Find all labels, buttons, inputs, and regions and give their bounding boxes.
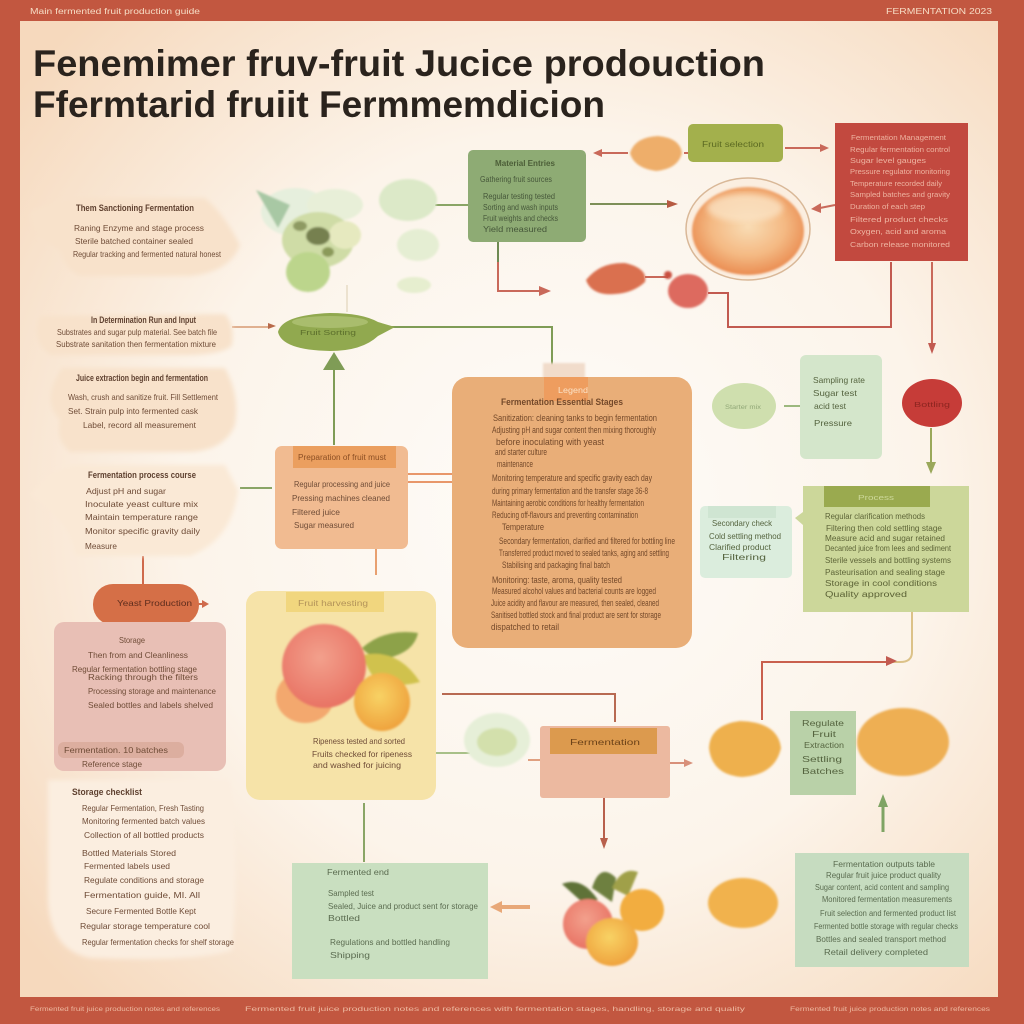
panel: yellow fruit box: and washed for juicing	[313, 760, 401, 770]
icon: pale green ovals	[379, 179, 439, 293]
label: green top tag: Fruit selection	[702, 140, 764, 149]
panel: large orange center box: maintenance	[497, 459, 533, 469]
panel: left callout 4: Inoculate yeast culture mix	[85, 499, 199, 509]
panel: large orange center box: during primary fermentation and the transfer stage 36-8	[492, 486, 648, 496]
icon: green oval center: Fruit Sorting	[300, 330, 356, 337]
header small text right: FERMENTATION 2023	[886, 7, 993, 16]
panel: green top box: Sorting and wash inputs	[483, 203, 558, 212]
pink box sub label	[58, 742, 184, 758]
icon: tab above center box	[543, 363, 585, 379]
panel: bottom green center box: Fermented end	[327, 867, 389, 877]
icon: juice bowl	[686, 178, 810, 280]
panel: top left callout: Raning Enzyme and stage process	[74, 223, 204, 233]
panel: red top right box: Filtered product checks	[850, 215, 948, 224]
footer small text: Fermented fruit juice production notes and references	[30, 1007, 220, 1013]
panel: large orange center box: Measured alcohol values and bacterial counts are logged	[492, 586, 656, 596]
panel: yellow fruit box: Fruit harvesting	[298, 599, 368, 608]
panel: top left callout: Regular tracking and fermented natural honest	[73, 249, 222, 259]
panel: top left callout	[30, 198, 240, 276]
icon: green oval center	[278, 313, 395, 351]
panel: large orange center box: Secondary fermentation, clarified and filtered for bottling line	[499, 536, 675, 546]
panel: olive right box: Pasteurisation and sealing stage	[825, 568, 946, 577]
panel: red top right box: Carbon release monitored	[850, 240, 950, 249]
panel: olive right box: Storage in cool conditions	[825, 579, 937, 588]
panel: bottom left list: Storage checklist	[72, 787, 142, 797]
panel: green top box: Regular testing tested	[483, 192, 555, 201]
panel: left callout 4: Measure	[85, 541, 117, 551]
panel: red top right box: Sampled batches and gravity	[850, 190, 950, 199]
panel: olive right box: Quality approved	[825, 590, 907, 599]
panel: right small green box: Sugar test	[813, 388, 858, 398]
panel: olive right box: Filtering then cold settling stage	[826, 524, 943, 533]
panel: left callout 4: Adjust pH and sugar	[86, 486, 166, 496]
icon: orange fruit right	[857, 708, 949, 776]
panel: left callout 2: Substrates and sugar pulp material. See batch file	[57, 327, 217, 337]
pink box sub label: Fermentation. 10 batches	[64, 745, 168, 755]
panel: top left callout: Sterile batched container sealed	[75, 236, 193, 246]
panel: salmon process box: Fermentation	[570, 738, 640, 747]
panel: large orange center box: Juice acidity and flavour are measured, then sealed, cleaned	[491, 598, 659, 608]
icon: orange fruit left	[709, 721, 781, 777]
panel: large orange center box: Monitoring temperature and specific gravity each day	[492, 473, 652, 483]
panel: green top box: Material Entries	[495, 159, 556, 168]
panel: left callout 3: Label, record all measurement	[83, 420, 197, 430]
panel: olive right box: Regular clarification methods	[825, 512, 925, 521]
panel: pale green small left: Clarified product	[709, 542, 772, 552]
panel: bottom green center box: Shipping	[330, 950, 370, 960]
footer small text: Fermented fruit juice production notes and references	[790, 1007, 990, 1013]
panel: left callout 3	[50, 368, 236, 452]
panel: pink box: Sealed bottles and labels shelved	[88, 700, 213, 710]
panel: bottom left list	[48, 780, 236, 959]
panel: left callout 3: Set. Strain pulp into fermented cask	[68, 406, 199, 416]
panel: red top right box	[835, 123, 968, 261]
panel: large orange center box: Maintaining aerobic conditions for healthy fermentation	[492, 498, 644, 508]
icon: pale herb bottom	[464, 713, 530, 767]
panel: green mid small box: Extraction	[804, 740, 844, 750]
panel: pink box: Storage	[119, 635, 145, 645]
panel: pink box: Processing storage and maintenance	[88, 686, 216, 696]
panel: green top box: Gathering fruit sources	[480, 175, 552, 184]
panel: large orange center box: before inoculating with yeast	[496, 437, 605, 447]
panel: bottom green center box: Sampled test	[328, 888, 375, 898]
panel: pink box: Reference stage	[82, 759, 142, 769]
panel: bottom green center box	[292, 863, 488, 979]
panel: bottom right green box: Retail delivery completed	[824, 948, 928, 957]
panel: right small green box: Sampling rate	[813, 375, 865, 385]
label: green top tag	[688, 124, 783, 162]
panel: red pill label	[93, 584, 199, 625]
panel: large orange center box: and starter culture	[495, 447, 547, 457]
panel: red top right box: Sugar level gauges	[850, 156, 926, 165]
panel: green mid small box: Regulate	[802, 718, 844, 728]
panel: bottom left list: Fermented labels used	[84, 861, 170, 871]
panel: large orange center box: Monitoring: taste, aroma, quality tested	[492, 575, 622, 585]
panel: green mid small box: Settling	[802, 754, 842, 764]
panel: bottom right green box: Fruit selection and fermented product list	[820, 909, 957, 918]
panel: bottom left list: Collection of all bottled products	[84, 830, 204, 840]
panel: left callout 2	[37, 314, 233, 355]
panel: orange small box: Filtered juice	[292, 507, 340, 517]
panel: yellow fruit box	[246, 591, 436, 800]
panel: olive right box	[795, 486, 969, 612]
icon: red circle right: Bottling	[914, 402, 950, 409]
arrow heads	[202, 144, 936, 913]
panel: bottom left list: Regular fermentation checks for shelf storage	[82, 937, 234, 947]
panel: bottom left list: Regular storage temperature cool	[80, 921, 210, 931]
panel: red top right box: Duration of each step	[850, 202, 925, 211]
panel: bottom right green box: Fermented bottle storage with regular checks	[814, 922, 958, 931]
panel: green mid small box: Batches	[802, 766, 844, 776]
panel: red top right box: Oxygen, acid and aroma	[850, 227, 947, 236]
panel: large orange center box: Sanitised bottled stock and final product are sent for storage	[491, 610, 661, 620]
panel: large orange center box: Sanitization: cleaning tanks to begin fermentation	[493, 413, 657, 423]
panel: large orange center box: Reducing off-flavours and preventing contamination	[492, 510, 638, 520]
panel: yellow fruit box: Ripeness tested and sorted	[313, 736, 405, 746]
panel: pink box: Racking through the filters	[88, 672, 198, 682]
panel: right small green box	[800, 355, 882, 459]
panel: large orange center box: Temperature	[502, 522, 544, 532]
panel: right small green box: acid test	[814, 401, 847, 411]
panel: red top right box: Fermentation Management	[851, 133, 947, 142]
panel: red top right box: Regular fermentation control	[850, 145, 950, 154]
panel: bottom right green box: Bottles and sealed transport method	[816, 935, 946, 944]
panel: bottom green center box: Regulations and bottled handling	[330, 937, 450, 947]
panel: bottom left list: Secure Fermented Bottle Kept	[86, 906, 197, 916]
panel: bottom right green box: Fermentation outputs table	[833, 860, 936, 869]
panel: pale green small left	[700, 506, 792, 578]
panel: green top box: Yield measured	[483, 225, 547, 234]
panel: large orange center box: Stabilising and packaging final batch	[502, 560, 610, 570]
panel: red top right box: Temperature recorded daily	[850, 179, 942, 188]
panel: left callout 4: Fermentation process course	[88, 470, 196, 480]
panel: green top box	[468, 150, 586, 242]
panel: green mid small box	[790, 711, 856, 795]
panel: orange small box: Preparation of fruit must	[298, 453, 387, 462]
title: Fenemimer fruv-fruit Jucice prodouction	[33, 43, 765, 84]
panel: bottom right green box	[795, 853, 969, 967]
panel: left callout 4	[30, 465, 238, 556]
icon: red circle right	[902, 379, 962, 427]
title: Ffermtarid fruiit Fermmemdicion	[33, 84, 605, 125]
panel: bottom right green box: Sugar content, acid content and sampling	[815, 883, 949, 892]
footer small text: Fermented fruit juice production notes and references with fermentation stages, handling, storage and quality	[245, 1007, 745, 1013]
panel: large orange center box: Legend	[558, 386, 588, 395]
panel: salmon process box	[540, 726, 670, 798]
panel: top left callout: Them Sanctioning Fermentation	[76, 203, 194, 213]
panel: bottom green center box: Sealed, Juice and product sent for storage	[328, 901, 478, 911]
panel: red top right box: Pressure regulator monitoring	[850, 167, 950, 176]
panel: pink box: Then from and Cleanliness	[88, 650, 188, 660]
icon: herb cluster	[256, 188, 363, 292]
panel: orange small box: Pressing machines cleaned	[292, 493, 390, 503]
panel: orange small box: Sugar measured	[294, 520, 354, 530]
icon: fruit cluster bottom	[562, 871, 664, 966]
panel: orange small box: Regular processing and juice	[294, 479, 390, 489]
panel: left callout 2: Substrate sanitation then fermentation mixture	[56, 339, 216, 349]
panel: bottom left list: Regulate conditions and storage	[84, 875, 204, 885]
panel: yellow fruit box: Fruits checked for ripeness	[312, 749, 412, 759]
panel: large orange center box: Fermentation Essential Stages	[501, 397, 623, 407]
icon: pale green oval right	[712, 383, 776, 429]
panel: olive right box: Process	[858, 495, 895, 502]
panel: pale green small left: Secondary check	[712, 518, 773, 528]
panel: bottom right green box: Monitored fermentation measurements	[822, 895, 952, 904]
panel: pink box: Regular fermentation bottling stage	[72, 664, 197, 674]
icon: pale green oval right: Starter mix	[725, 405, 761, 411]
panel: pale green small left: Cold settling method	[709, 531, 781, 541]
panel: green mid small box: Fruit	[812, 729, 837, 739]
header small text left: Main fermented fruit production guide	[30, 7, 201, 16]
panel: left callout 3: Wash, crush and sanitize fruit. Fill Settlement	[68, 392, 219, 402]
panel: bottom right green box: Regular fruit juice product quality	[826, 871, 941, 880]
icon: orange fruit top	[630, 136, 682, 171]
panel: green top box: Fruit weights and checks	[483, 214, 558, 223]
panel: bottom left list: Regular Fermentation, Fresh Tasting	[82, 803, 204, 813]
connector arrows	[143, 148, 932, 907]
panel: bottom left list: Monitoring fermented batch values	[82, 816, 205, 826]
panel: pink box	[54, 622, 226, 771]
panel: large orange center box: Transferred product moved to sealed tanks, aging and settling	[499, 548, 669, 558]
panel: olive right box: Decanted juice from lees and sediment	[825, 544, 952, 553]
title	[33, 43, 765, 125]
icon: orange fruit bottom	[708, 878, 778, 928]
panel: large orange center box: Adjusting pH and sugar content then mixing thoroughly	[492, 425, 656, 435]
panel: bottom green center box: Bottled	[328, 913, 360, 923]
panel: right small green box: Pressure	[814, 418, 852, 428]
panel: left callout 4: Maintain temperature range	[85, 512, 198, 522]
panel: large orange center box	[452, 377, 692, 648]
panel: orange small box	[275, 446, 408, 549]
footer small text	[30, 1007, 990, 1013]
panel: olive right box: Measure acid and sugar retained	[825, 534, 945, 543]
icon: red fruit pair	[586, 263, 708, 308]
panel: red pill label: Yeast Production	[117, 598, 192, 608]
panel: olive right box: Sterile vessels and bottling systems	[825, 556, 951, 565]
icon: peach and leaves	[276, 624, 420, 731]
panel: left callout 4: Monitor specific gravity daily	[85, 526, 201, 536]
panel: left callout 3: Juice extraction begin and fermentation	[76, 373, 208, 383]
panel: bottom left list: Fermentation guide, MI. All	[84, 890, 200, 900]
panel: left callout 2: In Determination Run and Input	[91, 315, 196, 325]
panel: bottom left list: Bottled Materials Stored	[82, 848, 176, 858]
panel: large orange center box: dispatched to retail	[491, 622, 559, 632]
panel: pale green small left: Filtering	[722, 552, 766, 562]
